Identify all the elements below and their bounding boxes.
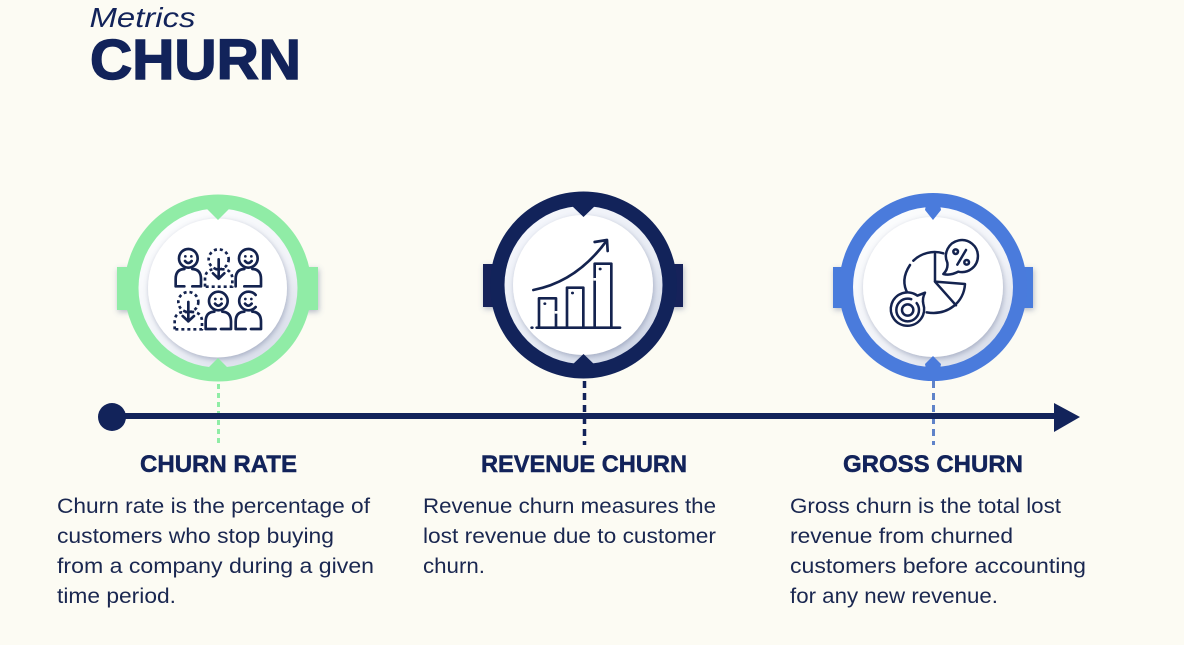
timeline arrow bbox=[98, 403, 1080, 432]
text: gross churn: Gross churn is the total lost bbox=[790, 494, 1061, 518]
icon: customers leaving bbox=[175, 249, 261, 329]
badge: gross churn bbox=[833, 193, 1033, 381]
text: churn rate bbox=[57, 494, 374, 608]
connector: gross churn bbox=[932, 381, 935, 445]
text: gross churn bbox=[790, 494, 1086, 608]
text: gross churn: revenue from churned bbox=[790, 524, 1013, 548]
text: churn rate: customers who stop buying bbox=[57, 524, 334, 548]
badge: revenue churn bbox=[483, 192, 683, 378]
heading: churn rate: CHURN RATE bbox=[140, 451, 297, 478]
text: revenue churn bbox=[423, 494, 716, 578]
badge: churn rate bbox=[117, 194, 318, 382]
panel: churn rate bbox=[57, 194, 374, 608]
panel: gross churn bbox=[790, 193, 1086, 608]
heading: revenue churn: REVENUE CHURN bbox=[481, 451, 687, 478]
connector: revenue churn bbox=[583, 381, 586, 445]
text: churn rate: Churn rate is the percentage of bbox=[57, 494, 370, 518]
text: churn rate: time period. bbox=[57, 584, 176, 608]
icon: revenue growth chart bbox=[532, 240, 620, 328]
icon: pie chart with percent bbox=[891, 240, 978, 326]
title bbox=[90, 2, 301, 92]
text: revenue churn: churn. bbox=[423, 554, 485, 578]
text: churn rate: from a company during a given bbox=[57, 554, 374, 578]
heading: gross churn: GROSS CHURN bbox=[843, 451, 1023, 478]
text: revenue churn: lost revenue due to customer bbox=[423, 524, 716, 548]
connector: churn rate bbox=[217, 384, 220, 445]
panel: revenue churn bbox=[423, 192, 716, 578]
text: revenue churn: Revenue churn measures the bbox=[423, 494, 716, 518]
title: Metrics bbox=[90, 2, 196, 33]
text: gross churn: for any new revenue. bbox=[790, 584, 998, 608]
title: CHURN bbox=[90, 28, 301, 92]
text: gross churn: customers before accounting bbox=[790, 554, 1086, 578]
